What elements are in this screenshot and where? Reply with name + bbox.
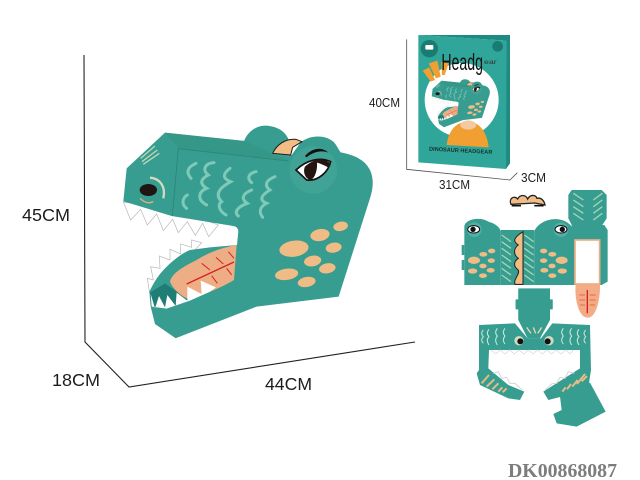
left head panel	[464, 219, 501, 285]
net teeth	[491, 350, 573, 354]
box title: Headg	[441, 49, 483, 75]
right side panel	[572, 225, 608, 285]
cheek spots	[274, 220, 349, 288]
label: width 44CM: 44CM	[265, 374, 312, 394]
net lower teeth	[493, 372, 574, 390]
label: box depth 3CM: 3CM	[521, 171, 546, 185]
net jaw marks	[482, 374, 587, 392]
neck stem	[516, 290, 553, 338]
inner mouth shade	[150, 283, 190, 309]
neck	[460, 120, 476, 130]
white circle	[425, 63, 499, 137]
tongue	[170, 245, 237, 300]
box title small: ear	[484, 59, 498, 66]
logo mark	[425, 45, 433, 50]
orange body	[447, 122, 489, 147]
logo badge	[421, 40, 438, 57]
snout top plane	[165, 133, 288, 161]
upper jaw frame	[477, 323, 591, 400]
paper net lower part	[477, 290, 606, 427]
label: box height 40CM: 40CM	[369, 96, 400, 110]
neck panel	[516, 288, 553, 320]
box front	[418, 35, 507, 169]
lower jaw block	[553, 383, 606, 427]
paper net upper part	[462, 190, 608, 320]
dinosaur head	[123, 126, 373, 338]
center panel	[501, 230, 534, 285]
upper teeth	[123, 202, 218, 237]
mini head	[432, 79, 490, 127]
zigzag spine	[515, 232, 523, 284]
net eyes	[467, 222, 568, 237]
label: box width 31CM: 31CM	[439, 178, 470, 192]
net scales	[482, 327, 586, 345]
box subtitle: DINOSAUR HEADGEAR	[429, 147, 492, 156]
main size dimension lines	[84, 55, 415, 387]
center stripes	[502, 235, 534, 282]
window	[575, 240, 600, 284]
head back bump	[243, 126, 290, 153]
tongue lines	[187, 252, 234, 284]
brow piece	[510, 195, 545, 206]
right head panel	[534, 219, 573, 285]
nostril marks	[141, 146, 159, 164]
net nostrils	[514, 336, 554, 345]
orange rays	[423, 61, 449, 82]
top flap	[568, 190, 607, 225]
net tongue	[575, 284, 600, 318]
flap stripes	[573, 193, 602, 220]
nostril	[140, 178, 164, 203]
side panel edge	[172, 149, 288, 216]
lower teeth	[147, 240, 202, 292]
net spots	[468, 249, 568, 278]
horn	[273, 139, 302, 155]
packaging box	[407, 35, 517, 180]
box side	[418, 35, 510, 169]
eye	[290, 146, 337, 194]
scale marks	[183, 163, 275, 217]
head base	[123, 133, 373, 338]
label: depth 18CM: 18CM	[52, 370, 100, 390]
box dimension line	[407, 39, 517, 180]
label: height 45CM: 45CM	[22, 205, 70, 225]
age badge	[492, 41, 503, 52]
left tabs	[462, 245, 464, 270]
lower teeth white	[151, 281, 216, 309]
